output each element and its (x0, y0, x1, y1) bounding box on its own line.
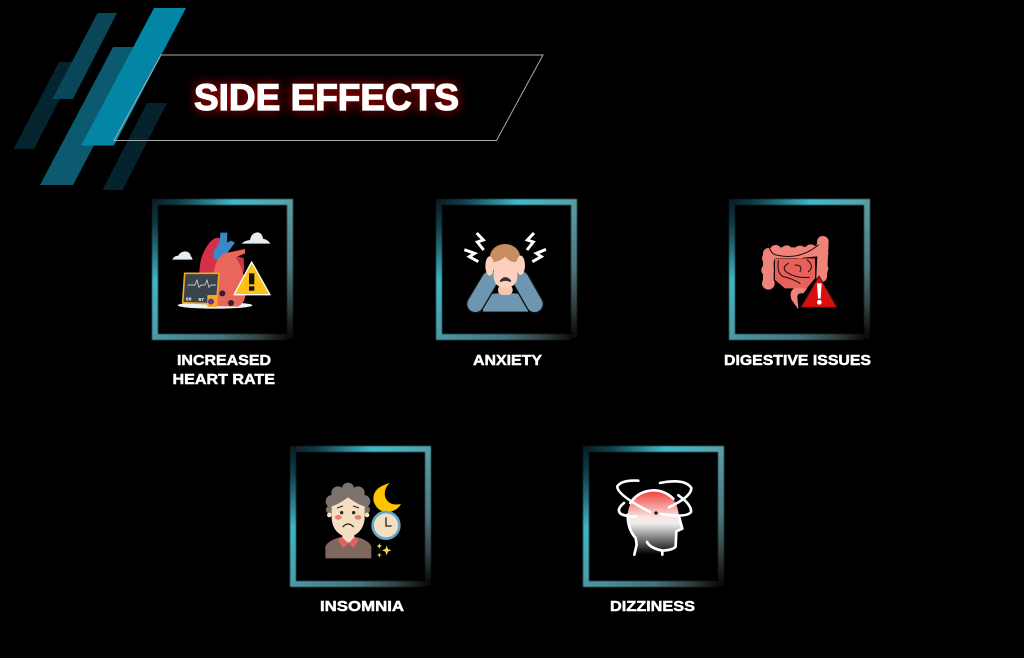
title banner outline (114, 55, 543, 140)
frame (729, 199, 870, 340)
frame (583, 446, 724, 587)
label: dizziness: DIZZINESS (610, 598, 695, 615)
icon: heart with monitor and warning (172, 232, 270, 309)
icon: heart with monitor and warning: 60 (186, 296, 192, 302)
icon: dizzy head (617, 481, 691, 555)
frame (152, 199, 293, 340)
label: anxiety: ANXIETY (473, 352, 542, 369)
title: SIDE EFFECTS (194, 77, 459, 118)
icon: intestines with warning (761, 236, 837, 309)
panel: insomnia (290, 446, 431, 587)
frame (290, 446, 431, 587)
panel: digestive issues (729, 199, 870, 340)
label: insomnia: INSOMNIA (320, 598, 404, 615)
label: increased heart rate: INCREASED (177, 352, 271, 369)
decorative slanted bars (14, 8, 186, 190)
panel: increased heart rate (152, 199, 293, 340)
panel: dizziness (583, 446, 724, 587)
label: digestive issues: DIGESTIVE ISSUES (724, 352, 871, 369)
icon: tired person with moon and clock (325, 483, 401, 558)
icon: heart with monitor and warning: 97 (198, 297, 204, 303)
frame (436, 199, 577, 340)
label: increased heart rate (172, 352, 275, 388)
icon: stressed person (464, 233, 546, 312)
panel: anxiety (436, 199, 577, 340)
title: SIDE EFFECTS (194, 77, 459, 118)
label: increased heart rate: HEART RATE (172, 371, 275, 388)
